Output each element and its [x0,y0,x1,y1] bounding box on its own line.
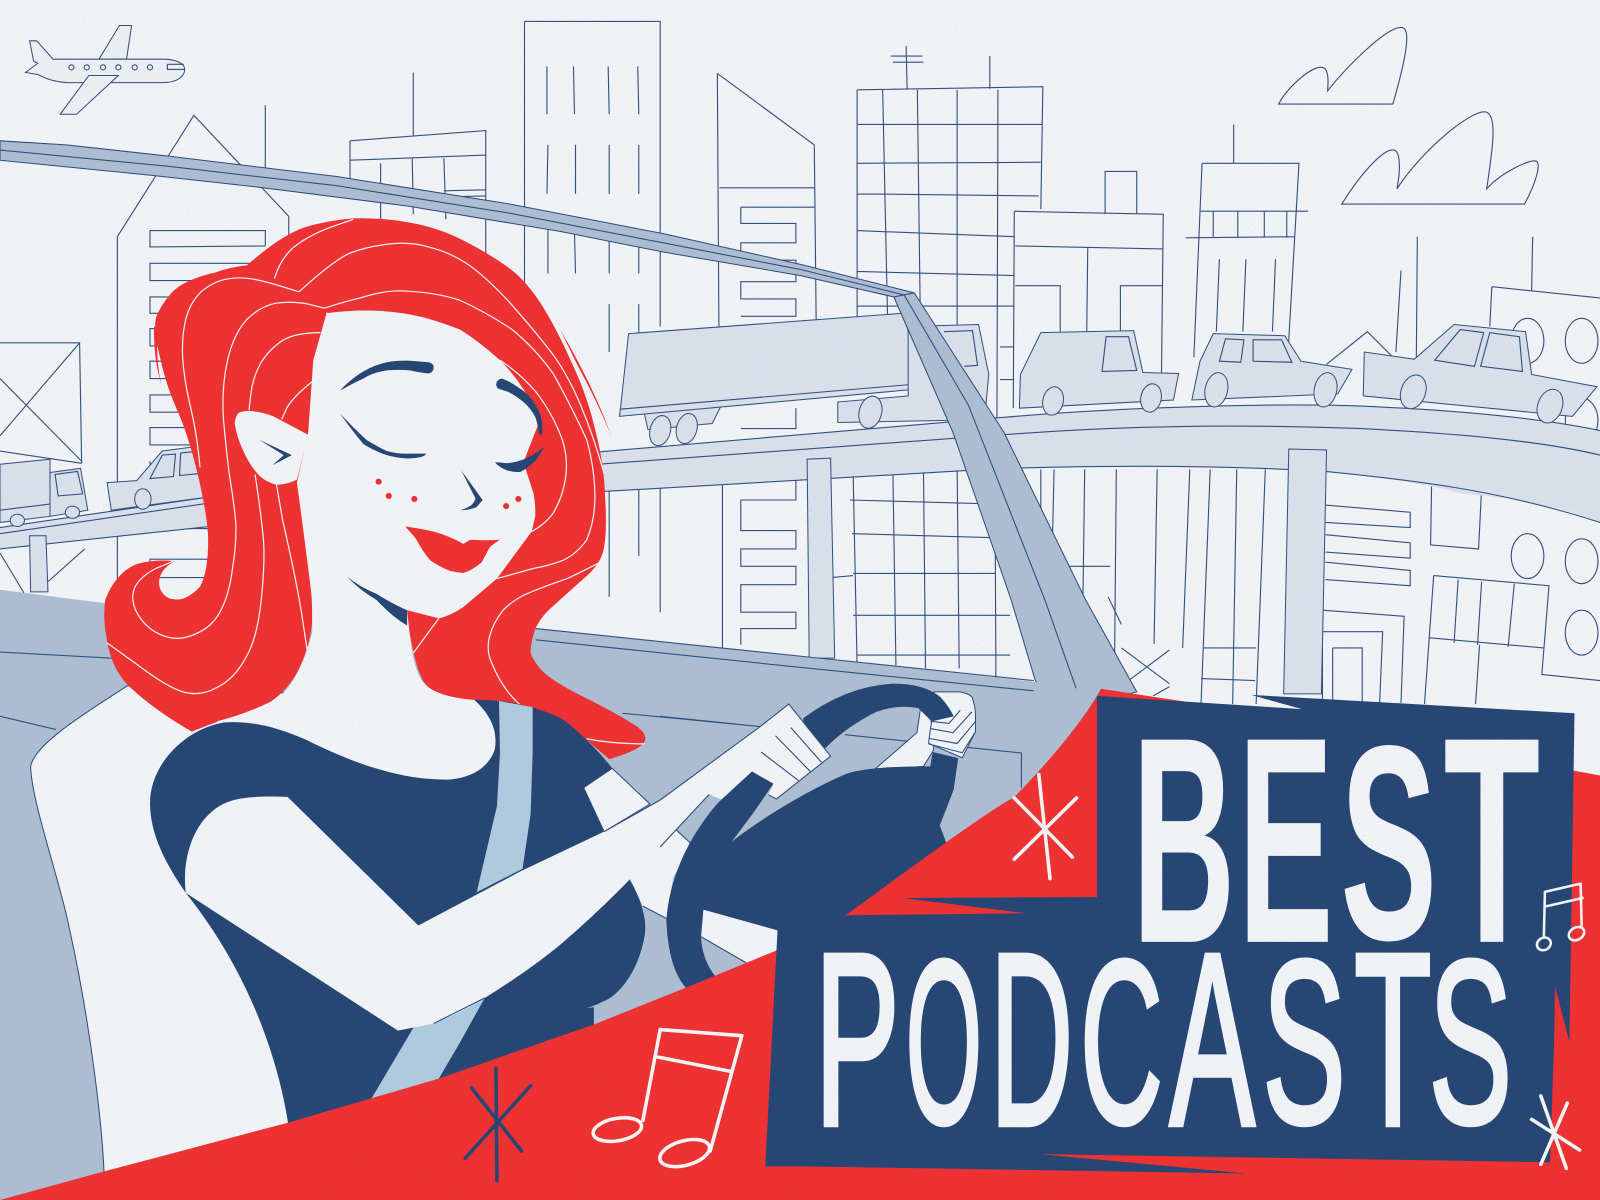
city skyline line drawing [117,21,1600,760]
word: PODCASTS: T [1354,903,1432,1177]
seat belt [369,701,533,1102]
word: PODCASTS: A [1170,902,1255,1177]
title: BEST PODCASTS [815,676,1540,1177]
word: PODCASTS: S [1429,912,1512,1172]
lips [405,527,500,573]
word: BEST: S [1340,688,1437,998]
face features [340,361,544,626]
far arm [584,768,692,918]
word: PODCASTS: S [1263,912,1346,1172]
title banner [765,695,1574,1173]
word: BEST: B [1132,676,1235,1004]
icon: airplane [26,26,185,114]
left side small road with truck and car [0,343,209,594]
ear [235,411,308,485]
icon: white sparkle [1014,774,1077,879]
steering wheel [666,684,958,989]
area under steering wheel [701,910,779,963]
car door and interior [0,590,1112,1200]
word: PODCASTS [815,901,1512,1177]
hair highlight lines [107,219,645,744]
word: BEST: T [1444,677,1540,1005]
car seat [31,686,306,1173]
icon: music note large [591,1030,742,1171]
icon: music note small [1535,884,1587,953]
word: BEST: E [1238,676,1333,1004]
word: PODCASTS: D [990,901,1073,1177]
icon: navy sparkle [465,1068,531,1181]
sedan on highway [1363,324,1597,427]
freckles [376,479,521,509]
truck on highway [619,313,989,448]
hair [104,218,645,759]
word: PODCASTS: P [815,902,900,1177]
word: BEST [1132,676,1540,1005]
van on highway [1019,331,1179,417]
clouds [1279,27,1538,204]
near arm and hand [185,704,831,1031]
right hand on wheel [873,692,976,770]
word: PODCASTS: O [906,911,982,1172]
windshield A-pillar [894,293,1137,714]
word: PODCASTS: C [1080,912,1163,1172]
elevated highway [597,405,1600,694]
windshield top frame [0,141,914,297]
icon: white sparkle bottom right [1532,1096,1580,1168]
dress [150,700,645,1128]
car on highway [1192,334,1352,409]
red foreground [0,689,1600,1200]
neck and face [216,310,540,786]
